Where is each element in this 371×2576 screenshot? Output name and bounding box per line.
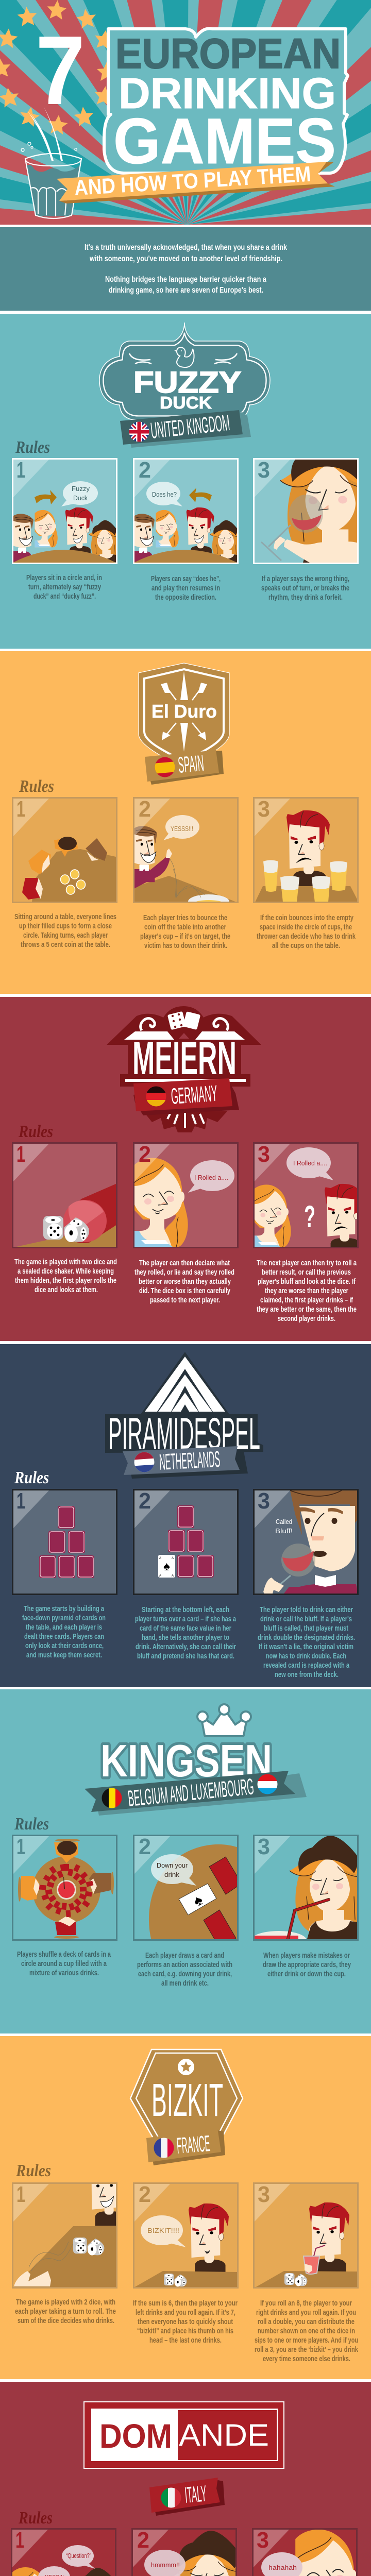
ribbon: Germany: GERMANY xyxy=(170,1081,218,1109)
icon: dice shaker xyxy=(63,1183,117,1243)
rule text: duck” and “ducky fuzz”. xyxy=(33,592,96,601)
rule text: circle. Taking turns, each player xyxy=(23,931,108,940)
panel 1: cards around cup xyxy=(12,1834,116,1940)
panel 3: drink forfeit: 3 xyxy=(258,457,270,483)
rules heading: Rules xyxy=(14,1468,49,1487)
badge: Domande: DOM xyxy=(99,2417,172,2455)
rule text: the table, and each player is xyxy=(26,1623,102,1632)
panel 1: players in circle: 1 xyxy=(16,457,25,483)
badge: Fuzzy Duck: FUZZY xyxy=(133,366,241,399)
rule text: coin off the table into another xyxy=(144,923,226,931)
title text: DRINKING xyxy=(119,69,336,117)
intro text: drinking game, so here are seven of Europe's best. xyxy=(109,286,263,295)
panel 1: coin throw from above xyxy=(12,796,116,903)
icon: red drink xyxy=(303,2245,325,2274)
speech bubble: hahahah xyxy=(261,2552,306,2576)
badge: Kingsen: KINGSEN xyxy=(100,1735,272,1786)
game 4: Piramidespel xyxy=(12,1352,358,1679)
ornaments xyxy=(129,353,237,364)
speech bubbles xyxy=(38,2545,95,2576)
panel 2: girl declares roll xyxy=(133,1142,238,1248)
speech bubble: down your drink xyxy=(151,1854,196,1886)
speech bubble: hahahah: hahahah xyxy=(268,2564,297,2571)
panel 2: does he: 2 xyxy=(139,457,151,483)
hero banner xyxy=(0,0,371,242)
rule text: each player taking a turn to roll. The xyxy=(15,2308,116,2316)
panel 2: card turned over xyxy=(134,1488,238,1594)
badge: Domande xyxy=(84,2402,284,2468)
panel 1: rolling dice: 1 xyxy=(16,2182,25,2207)
icon: star badge xyxy=(178,2059,194,2075)
badge: El Duro shield xyxy=(139,663,229,785)
panel 3: drink through straw: 3 xyxy=(258,1834,270,1859)
arrow right xyxy=(35,490,57,504)
badge: Piramidespel xyxy=(105,1352,263,1479)
speech bubble: yesss: YESSS!!! xyxy=(171,825,193,833)
panel 1: card pyramid xyxy=(12,1488,116,1594)
callout: called bluff xyxy=(275,1518,293,1535)
badge: Domande: ANDE xyxy=(179,2418,269,2452)
speech bubble: does he: Does he? xyxy=(152,490,177,498)
rule text: circle around a cup filled with a xyxy=(21,1960,107,1968)
rule text xyxy=(14,913,356,950)
panel 2: bizkit shout xyxy=(134,2182,238,2287)
speech bubble: I rolled a xyxy=(286,1147,333,1180)
rule text: player turns over a card – if she has a xyxy=(135,1615,237,1623)
rule text: they rolled, or lie and say they rolled xyxy=(134,1268,234,1277)
badge: El Duro shield: El Duro xyxy=(151,701,217,722)
arrow left xyxy=(189,488,212,502)
cards: A xyxy=(159,1557,161,1560)
panel 3: next player doubts: 3 xyxy=(258,1142,270,1167)
cards: A xyxy=(159,1574,161,1578)
rule text: now has to drink double. Each xyxy=(266,1652,346,1660)
title text: GAMES xyxy=(113,106,336,177)
panel 3: sipping forfeit xyxy=(254,2182,358,2287)
rule text: second player drinks. xyxy=(278,1315,335,1323)
badge: Fuzzy Duck: DUCK xyxy=(160,393,212,412)
panel 2: does he xyxy=(134,457,238,564)
icon: wheat and arrows xyxy=(164,686,205,738)
rule text: The game starts by building a xyxy=(24,1605,105,1613)
panel 3: drink through straw xyxy=(253,1835,359,1941)
speech bubble: yesss xyxy=(163,815,199,840)
icon: crown xyxy=(198,1705,250,1735)
panel 1: cards around cup: 1 xyxy=(16,1834,25,1859)
icon: wine glass and arm xyxy=(261,495,359,563)
intro text: Nothing bridges the language barrier quicker than a xyxy=(105,275,266,284)
badge: Fuzzy Duck xyxy=(99,323,270,448)
panel 2: card draw: ♠ xyxy=(190,1891,206,1910)
cards: A xyxy=(172,1557,174,1560)
rule text: left drinks and you roll again. If it's 7, xyxy=(136,2309,235,2317)
ribbon: Spain: SPAIN xyxy=(177,751,205,778)
callout: called bluff: Called xyxy=(276,1518,292,1526)
rule text: “bizkit!” and place his thumb on his xyxy=(137,2327,233,2335)
game 2: El Duro xyxy=(12,663,359,950)
panel 2: card turned over: 2 xyxy=(139,1488,151,1514)
man drinking xyxy=(263,1490,358,1594)
panel 3: angry man with beers: 3 xyxy=(258,796,270,822)
rule text: Players can say “does he”, xyxy=(151,575,221,583)
icon: dice xyxy=(167,1011,200,1030)
rule text: rhythm, they drink a forfeit. xyxy=(268,594,343,602)
speech bubble: hmmmm xyxy=(144,2550,188,2576)
ribbon: United Kingdom: UNITED KINGDOM xyxy=(149,410,231,444)
badge: Kingsen xyxy=(85,1705,307,1816)
rule text: If the sum is 6, then the player to your xyxy=(133,2299,238,2308)
bubble text: Down your xyxy=(157,1861,188,1869)
rule text: Each player draws a card and xyxy=(145,1952,224,1960)
panel 3: called bluff xyxy=(254,1488,358,1594)
rule text xyxy=(22,1605,355,1679)
rule text: The game is played with 2 dice, with xyxy=(16,2298,115,2307)
rule text: better or worse than they actually xyxy=(139,1278,231,1286)
rule text: the opposite direction. xyxy=(155,594,216,602)
panel 1: question and answer xyxy=(11,2528,117,2576)
game 5: Kingsen xyxy=(12,1705,360,1988)
rule text: performs an action associated with xyxy=(137,1961,232,1969)
speech bubble: fuzzy duck: Duck xyxy=(73,494,88,502)
panel 2: hesitating player: 2 xyxy=(137,2528,149,2553)
game 6: Bizkit xyxy=(12,2049,359,2363)
rule text: mixture of various drinks. xyxy=(29,1969,99,1977)
panel 1: coin throw from above: 1 xyxy=(16,796,25,822)
panel 3: sipping forfeit: 3 xyxy=(258,2182,270,2207)
game 3: Meiern xyxy=(12,1006,364,1323)
rule text: they are worse than the player xyxy=(265,1287,348,1295)
title frame xyxy=(104,28,348,173)
ribbon: Italy: ITALY xyxy=(184,2481,208,2508)
panel 2: girl declares roll: 2 xyxy=(139,1142,151,1167)
ribbon: Netherlands xyxy=(123,1446,248,1479)
rule text: Sitting around a table, everyone lines xyxy=(14,913,116,921)
panel 1: dice and shaker xyxy=(12,1142,117,1248)
panel 2: card draw: 2 xyxy=(139,1834,151,1859)
rule text: Each player tries to bounce the xyxy=(143,914,227,922)
coins xyxy=(61,870,86,894)
panel 1: rolling dice xyxy=(12,2157,128,2287)
rule text: only look at their cards once, xyxy=(25,1642,104,1650)
panel 1: players in circle xyxy=(12,457,117,564)
rules heading: Rules xyxy=(18,1122,53,1141)
speech bubble: bizkit xyxy=(141,2215,186,2247)
sunburst background xyxy=(0,0,371,242)
flourishes xyxy=(124,1031,245,1040)
bubble text xyxy=(157,1861,188,1878)
rule text xyxy=(15,2298,359,2363)
panel 2: hesitating player xyxy=(132,2528,240,2576)
rule text: up their filled cups to form a close xyxy=(19,922,112,930)
rule text: and must keep them secret. xyxy=(26,1651,102,1659)
intro text xyxy=(85,243,287,295)
panel 3: angry man with beers xyxy=(254,796,359,903)
rule text xyxy=(14,1258,357,1323)
rule text: then everyone has to quickly shout xyxy=(138,2318,233,2326)
icon: duck xyxy=(175,347,194,367)
cards: ♠ xyxy=(163,1560,170,1573)
title text: EUROPEAN xyxy=(115,30,341,77)
beer glasses xyxy=(263,860,347,902)
badge: Meiern xyxy=(107,1006,261,1132)
panel 3: called bluff: 3 xyxy=(258,1488,270,1514)
cards xyxy=(39,1506,94,1578)
panel 1: card pyramid: 1 xyxy=(16,1488,25,1514)
panel 2: bounce into cup xyxy=(133,796,238,909)
rule text: and play then resumes in xyxy=(151,584,220,592)
stars xyxy=(0,0,116,135)
callout: called bluff: Bluff! xyxy=(275,1527,293,1535)
ribbon: Germany xyxy=(133,1078,239,1115)
hand xyxy=(14,2271,51,2286)
cards xyxy=(158,1505,214,1578)
speech bubble: I rolled a: I Rolled a.... xyxy=(293,1159,327,1167)
rule text: dice and looks at them. xyxy=(35,1286,98,1294)
rule text: turn, alternately say “fuzzy xyxy=(28,583,101,591)
cup xyxy=(57,1877,76,1900)
rule text: The player can then declare what xyxy=(139,1259,230,1267)
rule text: them hidden, the first player rolls the xyxy=(15,1277,116,1285)
intro text: with someone, you've moved on to another level of friendship. xyxy=(89,255,282,263)
speech bubble: I rolled a: I Rolled a.... xyxy=(194,1174,228,1181)
speech bubble: fuzzy duck: Fuzzy xyxy=(72,485,90,493)
bubble text: drink xyxy=(164,1871,180,1878)
game 7: Domande xyxy=(11,2402,361,2576)
speech bubble: fuzzy duck xyxy=(61,481,98,506)
rules heading: Rules xyxy=(15,2161,51,2180)
rule text: face-down pyramid of cards on xyxy=(22,1614,106,1622)
rules heading: Rules xyxy=(19,777,54,796)
rule text: sum of the dice decides who drinks. xyxy=(18,2317,114,2325)
gear ticks xyxy=(167,1113,204,1128)
title text xyxy=(113,30,341,177)
panel 2: bounce into cup: 2 xyxy=(139,796,151,822)
rule text: did. The dice box is then carefully xyxy=(139,1287,230,1295)
question mark: ? xyxy=(304,1199,315,1234)
rule text: new one from the deck. xyxy=(275,1671,339,1679)
rule text: Players shuffle a deck of cards in a xyxy=(17,1951,111,1959)
speech bubble: I rolled a xyxy=(188,1160,234,1193)
rule text xyxy=(17,1951,351,1988)
speech bubble: hmmmm: hmmmm!! xyxy=(151,2561,180,2569)
panel 3: next player doubts xyxy=(253,1142,364,1252)
panel 2: bizkit shout: 2 xyxy=(139,2182,151,2207)
ribbon: Netherlands: NETHERLANDS xyxy=(159,1447,221,1475)
players from above xyxy=(22,837,107,900)
ribbon: United Kingdom xyxy=(120,410,251,448)
rule text: card of the same face value in her xyxy=(140,1624,231,1633)
rule text: passed to the next player. xyxy=(150,1296,220,1304)
rules heading: Rules xyxy=(14,1815,49,1834)
rule text: bluff and pretend she has that card. xyxy=(137,1652,234,1660)
subtitle ribbon: AND HOW TO PLAY THEM xyxy=(74,162,312,200)
rule text: throws a 5 cent coin at the table. xyxy=(21,941,110,949)
rule text xyxy=(26,574,349,602)
rule text: Players sit in a circle and, in xyxy=(26,574,102,582)
number seven: 7 xyxy=(36,16,85,125)
ribbon: France: FRANCE xyxy=(176,2131,211,2159)
rule text: head – the last one drinks. xyxy=(149,2336,222,2345)
rules heading: Rules xyxy=(18,2509,53,2528)
rule text: hand, she tells another player to xyxy=(142,1634,229,1642)
drink and straw xyxy=(251,1900,329,1950)
panel 3: laughing player xyxy=(252,2528,361,2576)
ribbon: France xyxy=(146,2128,225,2165)
rule text: dealt three cards. Players can xyxy=(24,1633,104,1641)
panel 1: question and answer: 1 xyxy=(15,2528,24,2553)
ribbon: Italy xyxy=(149,2478,225,2516)
rule text: victim has to down their drink. xyxy=(144,942,227,950)
badge: Bizkit: BIZKIT xyxy=(151,2075,223,2126)
rule text: all men drink etc. xyxy=(161,1979,209,1988)
rule text: all the cups on the table. xyxy=(272,942,340,950)
panel 1: dice and shaker: 1 xyxy=(16,1142,25,1167)
ribbon: Spain xyxy=(145,750,224,785)
cards: A xyxy=(172,1574,174,1578)
rule text: Starting at the bottom left, each xyxy=(142,1606,229,1614)
intro text: It's a truth universally acknowledged, that when you share a drink xyxy=(85,243,287,252)
badge: Bizkit xyxy=(130,2049,243,2165)
speech bubbles: “Question?” xyxy=(66,2552,91,2560)
game 1: Fuzzy Duck xyxy=(12,323,368,602)
icon: glass with splash xyxy=(21,107,81,218)
rules heading: Rules xyxy=(15,438,50,457)
badge: Meiern: MEIERN xyxy=(132,1033,237,1084)
cards ring xyxy=(39,1864,93,1917)
ribbon: Belgium and Luxembourg xyxy=(85,1771,307,1816)
playing cards xyxy=(179,1857,239,1941)
speech bubble: bizkit: BIZKIT!!!! xyxy=(147,2227,179,2234)
rule text: either drink or down the cup. xyxy=(267,1970,346,1978)
rule text: player's cup – if it's on target, the xyxy=(140,933,230,941)
rule text: drink. Alternatively, she can call their xyxy=(136,1643,236,1651)
players from above xyxy=(18,1839,114,1939)
rule text: The game is played with two dice and xyxy=(14,1258,117,1266)
speech bubble: does he xyxy=(146,482,182,506)
rule text: each card, e.g. downing your drink, xyxy=(138,1970,232,1978)
rule text: a sealed dice shaker. While keeping xyxy=(18,1267,114,1276)
panel 2: card draw xyxy=(134,1834,239,1941)
panel 3: laughing player: 3 xyxy=(257,2528,269,2553)
panel 3: drink forfeit xyxy=(253,458,359,564)
rule text: bluff is called, that player must xyxy=(264,1624,348,1633)
